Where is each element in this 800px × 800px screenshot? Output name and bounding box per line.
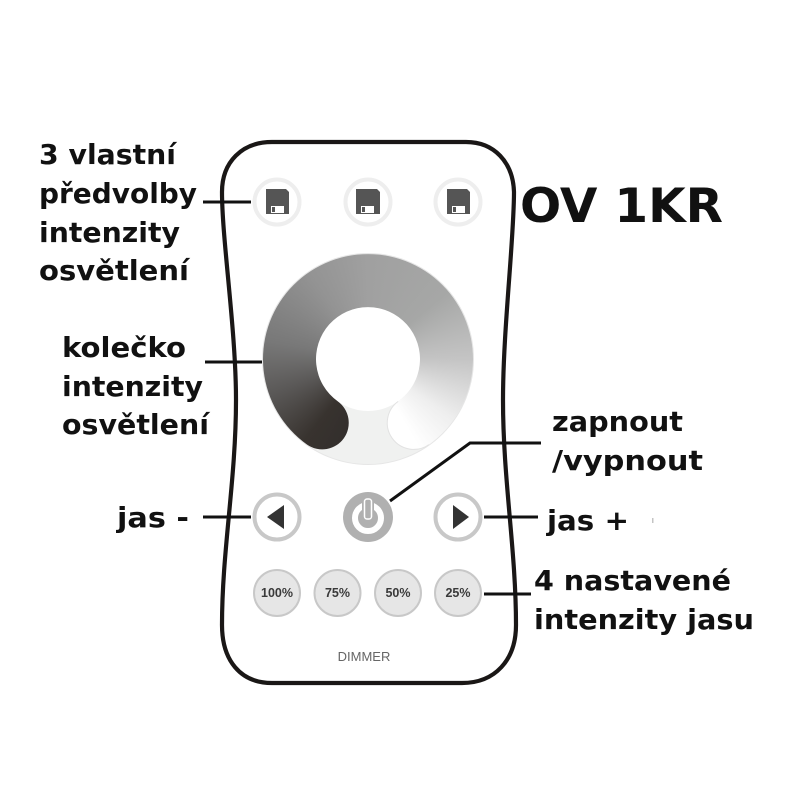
25% button: 25% [445, 586, 471, 600]
label: preset levels: intenzity jasu [534, 603, 754, 636]
power button [343, 492, 393, 542]
label: on off: zapnout [552, 405, 683, 438]
remote control body [222, 142, 516, 683]
100% button [254, 570, 300, 616]
small speck [652, 518, 654, 523]
75% button [314, 570, 360, 616]
75% button: 75% [325, 586, 350, 600]
brightness wheel [262, 253, 474, 465]
50% button: 50% [385, 586, 411, 600]
preset button 1 [254, 180, 300, 224]
label: presets: intenzity [39, 216, 180, 249]
brightness up button [436, 494, 480, 540]
label: preset levels [534, 564, 754, 636]
100% button: 100% [261, 586, 293, 600]
label: preset levels: 4 nastavené [534, 564, 731, 597]
dimmer label: DIMMER [338, 649, 390, 664]
brightness down button [254, 494, 300, 540]
label: on off [552, 405, 703, 477]
label: presets: předvolby [39, 177, 197, 210]
connector lines [203, 202, 541, 594]
label: wheel [62, 331, 210, 441]
label: presets: 3 vlastní [39, 138, 177, 171]
25% button [435, 570, 481, 616]
label: presets: osvětlení [39, 254, 190, 287]
label: brightness up: jas + [546, 504, 629, 537]
50% button [375, 570, 421, 616]
label: wheel: intenzity [62, 370, 203, 403]
preset button 3 [436, 180, 480, 224]
label: wheel: kolečko [62, 331, 186, 364]
title: OV 1KR [520, 179, 723, 234]
label: on off: /vypnout [552, 444, 703, 477]
preset button 2 [346, 180, 390, 224]
label: brightness down: jas - [116, 501, 189, 534]
label: presets [39, 138, 197, 287]
label: wheel: osvětlení [62, 408, 210, 441]
